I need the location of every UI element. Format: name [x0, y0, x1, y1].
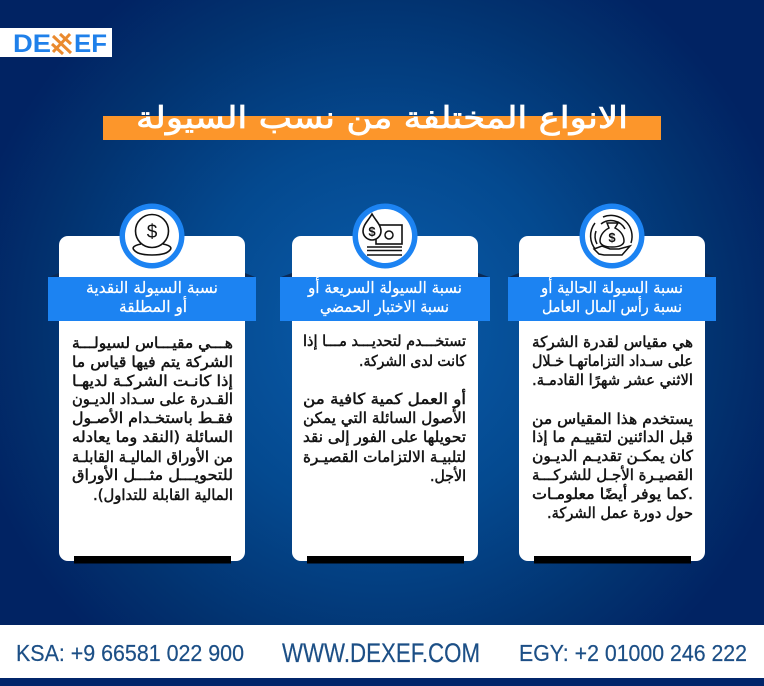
ribbon heading [280, 273, 490, 321]
panel: quick ratio [280, 204, 490, 564]
body text: المالية القابلة للتداول). [93, 486, 233, 504]
body text: هي مقياس لقدرة الشركة [532, 333, 693, 352]
phone: KSA: KSA: +9 66581 022 900 [16, 640, 244, 666]
body text: الأجل. [430, 466, 466, 485]
body text: لتلبيـة الالتزامات القصيـرة [303, 448, 466, 466]
body text: السائلة (النقد وما يعادله [72, 428, 233, 446]
icon: money bag in hand: $ [608, 230, 616, 245]
body text: يستخدم هذا المقياس من [532, 410, 693, 428]
ribbon heading: نسبة رأس المال العامل [542, 296, 682, 317]
body text: القـدرة على سـداد الديـون [72, 390, 233, 408]
body text: فقـط باستخـدام الأصـول [72, 408, 233, 427]
body text [303, 332, 467, 485]
ribbon heading [48, 273, 256, 321]
ribbon heading: نسبة السيولة النقدية [86, 278, 218, 298]
footer [0, 625, 764, 686]
body text: .كما يوفر أيضًا معلومـات [532, 484, 693, 503]
panel: current ratio [508, 204, 716, 564]
card base bar [307, 556, 464, 564]
body text: تستخـــدم لتحديـــد مـــا إذا [303, 332, 466, 350]
phone: EGY: EGY: +2 01000 246 222 [519, 640, 747, 666]
body text: من الأوراق الماليـة القابلـة [72, 447, 233, 466]
card base bar [74, 556, 231, 564]
body text: الاثني عشر شهرًا القادمـة. [532, 371, 693, 390]
ribbon heading: أو المطلقة [119, 296, 187, 317]
title banner [103, 101, 661, 140]
icon: coin: $ [147, 222, 158, 243]
body text: للتحويـــل مثـــل الأوراق [72, 465, 233, 484]
logo: EF [74, 30, 107, 58]
body text: حول دورة عمل الشركة. [547, 504, 693, 522]
body text: كان يمكـن تقديـم الديـون [532, 447, 694, 465]
icon: coin [120, 204, 184, 268]
icon: money and drop [352, 204, 418, 268]
body text: الشركة يتم فيها قياس ما [72, 353, 233, 371]
body text: قبل الدائنين لتقييـم ما إذا [532, 428, 693, 446]
icon: money bag in hand [580, 204, 644, 268]
ribbon heading: نسبة السيولة الحالية أو [540, 277, 683, 298]
card [292, 236, 478, 561]
panel: cash ratio [48, 204, 256, 564]
body text: كانت لدى الشركة. [359, 352, 467, 370]
logo [0, 28, 112, 58]
card base bar [534, 556, 691, 564]
ribbon heading: نسبة السيولة السريعة أو [307, 277, 462, 298]
body text: أو العمل كمية كافية من [303, 389, 466, 408]
ribbon heading: نسبة الاختبار الحمضي [320, 297, 449, 317]
card [59, 236, 245, 561]
body text: هـــي مقيـــاس لسيولـــة [72, 334, 233, 353]
body text: تحويلها على الفور إلى نقد [303, 428, 466, 446]
body text: القصيـرة الأجـل للشركـــة [532, 465, 693, 484]
icon: money and drop: $ [368, 224, 376, 239]
body text: إذا كانـت الشركـة لديهـا [72, 372, 233, 390]
ribbon heading [508, 273, 716, 321]
logo: DE [13, 30, 51, 58]
body text: الأصول السائلة التي يمكن [303, 408, 466, 428]
body text [532, 333, 694, 522]
website: WWW.DEXEF.COM [282, 638, 480, 668]
body text [72, 334, 233, 504]
card [519, 236, 705, 561]
body text: على سـداد التزاماتهـا خـلال [532, 352, 693, 370]
title banner: الانواع المختلفة من نسب السيولة [136, 101, 628, 136]
